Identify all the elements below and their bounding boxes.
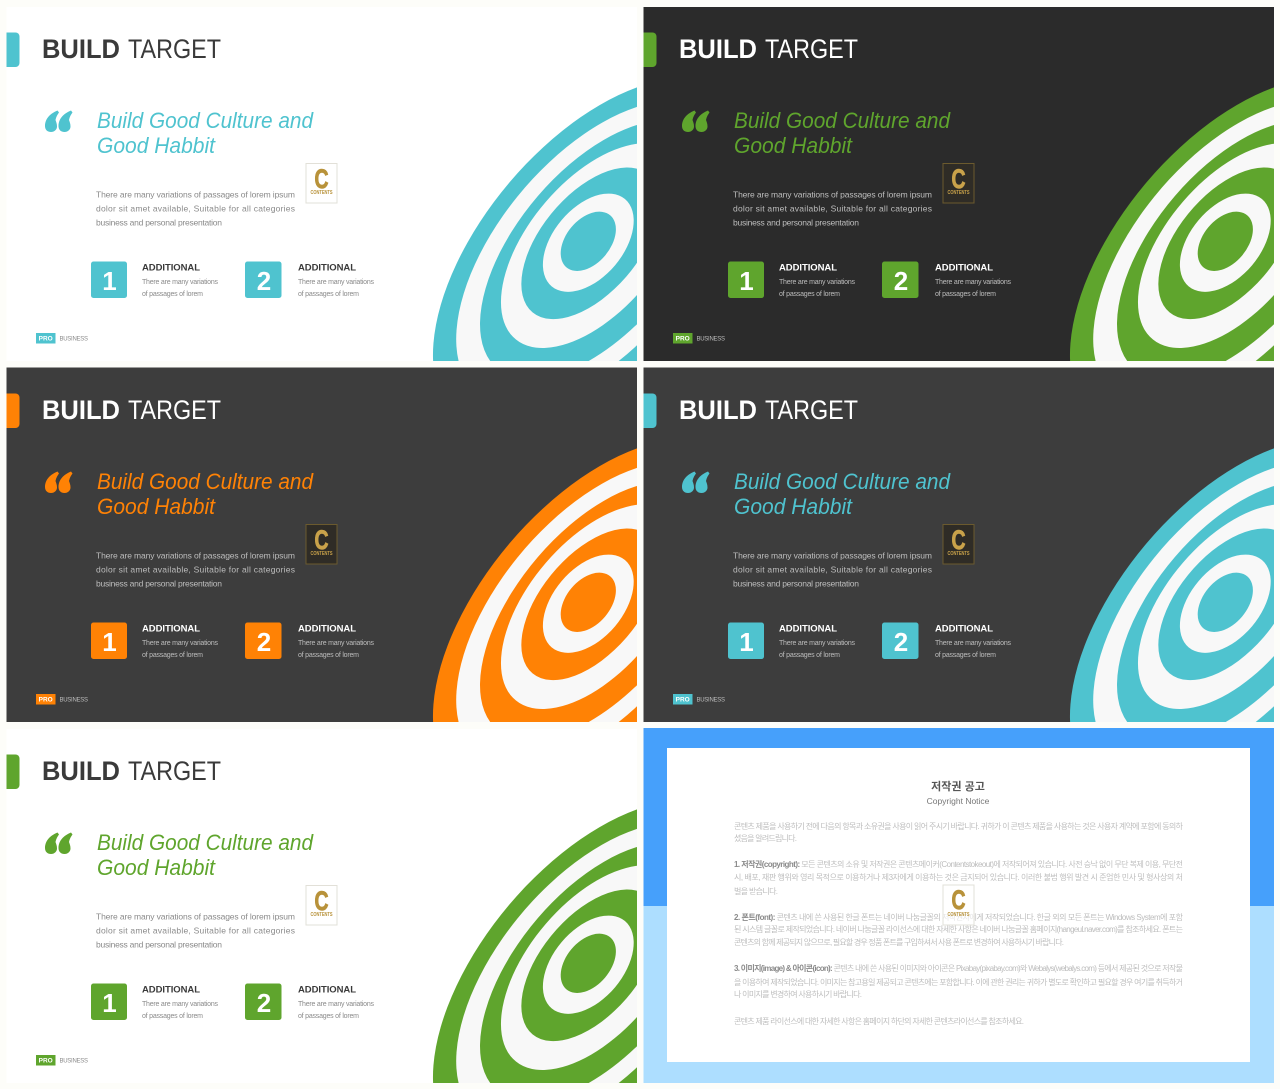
item 1: 1 [102,627,117,657]
body text: business and personal presentation [96,940,222,950]
logo: C [952,164,966,194]
logo: CONTENTS [948,190,970,196]
tab marker [6,394,20,428]
footer badge: PRO [676,697,690,704]
headline [97,469,314,519]
target graphic [433,448,652,722]
logo [943,885,974,925]
body text: There are many variations of passages of lorem ipsum [96,550,295,560]
item 1: 1 [102,988,117,1018]
title [42,34,221,64]
footer badge: BUSINESS [60,1058,88,1064]
logo: CONTENTS [310,190,333,196]
notice heading [927,779,990,806]
body text [733,550,932,588]
target graphic [433,809,652,1083]
footer badge [673,694,725,704]
item 1 [91,984,218,1020]
item 1: There are many variations [142,640,218,647]
footer badge: PRO [39,1058,53,1065]
item 2: 2 [257,266,271,296]
body text [96,912,295,950]
item 1: There are many variations [779,279,856,286]
item 2: ADDITIONAL [298,624,356,634]
body text: dolor sit amet available, Suitable for all categories [96,564,295,574]
item 2: 2 [257,627,271,657]
item 2: of passages of lorem [298,652,359,659]
item 2: There are many variations [298,640,374,647]
tab marker [6,754,20,789]
item 2 [882,262,1012,298]
panel: slide 1 white teal [6,7,652,361]
item 1 [91,262,218,298]
body text: dolor sit amet available, Suitable for all categories [96,204,295,214]
item 2 [245,984,374,1020]
headline: Build Good Culture and [97,830,314,855]
title: TARGET [765,395,858,425]
tab marker [644,32,656,67]
target graphic [1070,448,1280,722]
body text: There are many variations of passages of lorem ipsum [96,190,295,200]
headline: Build Good Culture and [97,469,314,494]
title: TARGET [128,34,221,64]
title: TARGET [128,756,221,786]
body text: dolor sit amet available, Suitable for all categories [733,564,932,574]
title: TARGET [128,395,221,425]
item 1: of passages of lorem [779,652,840,659]
body text [733,190,932,228]
notice heading: 저작권 공고 [931,779,985,793]
item 1: There are many variations [142,1001,218,1008]
footer badge [673,333,725,344]
title: TARGET [765,34,858,64]
item 2 [245,262,374,298]
notice heading: Copyright Notice [927,796,990,806]
headline: Good Habbit [97,494,216,519]
item 1: of passages of lorem [142,291,203,298]
headline: Good Habbit [734,494,853,519]
footer badge [36,1055,88,1066]
headline [734,108,951,158]
headline [734,469,951,519]
item 1 [728,622,856,659]
item 2: of passages of lorem [935,652,996,659]
footer badge: BUSINESS [696,698,725,704]
body text: business and personal presentation [733,578,859,588]
body text [96,550,295,588]
notice body text: 시, 배포, 재판 행위와 영리 목적으로 이용하거나 제3자에게 이용하는 것은 금지되어 있습니다. 이러한 불법 행위 발견 시 준엄한 민사 및 형사상의 처 [734,872,1183,882]
logo [943,164,974,203]
item 2: 2 [257,988,271,1018]
notice body text: 나 이미지를 변경하여 사용하시기 바랍니다. [734,989,862,999]
body text: dolor sit amet available, Suitable for all categories [733,204,932,214]
item 2: ADDITIONAL [935,262,993,274]
item 2: ADDITIONAL [298,984,356,996]
icon: quotation mark [682,472,710,493]
body text: There are many variations of passages of lorem ipsum [733,190,932,200]
item 1: of passages of lorem [142,1013,203,1020]
tab marker [6,32,20,67]
body text [96,190,295,228]
panel: slide 2 black green [644,7,1280,361]
panel: slide 5 white green [6,729,652,1083]
footer badge: BUSINESS [60,698,88,704]
title: BUILD [679,34,757,64]
logo [943,524,974,564]
body text: dolor sit amet available, Suitable for all categories [96,926,295,936]
headline: Build Good Culture and [734,469,951,494]
icon: quotation mark [682,110,710,132]
notice body text: 벌을 받습니다. [734,886,778,896]
item 2: There are many variations [298,1001,374,1008]
item 1 [91,622,218,659]
item 2: 2 [894,266,908,296]
headline: Build Good Culture and [734,108,951,133]
logo: C [314,525,328,555]
notice body text: 된 시스템 글꼴로 제작되었습니다. 네이버 나눔글꼴 라이선스에 대한 자세한 사항은 네이버 나눔글꼴 홈페이지(hangeul.naver.com)를 참조하세요. 폰트는 [734,924,1183,934]
footer badge [36,333,88,344]
item 1: 1 [102,266,117,296]
title [42,756,221,786]
item 1: ADDITIONAL [779,624,837,634]
logo: C [952,525,966,555]
headline: Good Habbit [97,133,216,158]
item 2: There are many variations [298,279,374,286]
item 1: of passages of lorem [779,291,840,298]
item 2: of passages of lorem [298,1013,359,1020]
notice body text: 셨음을 알려드립니다. [734,833,797,843]
notice body text: 3. 이미지(image) & 아이콘(icon): 콘텐츠 내에 쓴 사용된 이미지와 아이콘은 Pixabay(pixabay.com)와 Webalys(webalys.com) 등에서 제공된 것으로 저작물 [734,963,1183,973]
logo [306,164,337,203]
body text: business and personal presentation [96,578,222,588]
notice body text: 2. 폰트(font): 콘텐츠 내에 쓴 사용된 한글 폰트는 네이버 나눔글꼴의 저작권자에게 저작되었습니다. 한글 외의 모든 폰트는 Windows System에 포함 [734,912,1184,922]
notice body text: 을 이용하여 제작되었습니다. 이미지는 참고용일 제공되고 콘텐츠에는 포함합니다. 이에 관한 권리는 귀하가 별도로 확인하고 필요할 경우 여기를 취득하거 [734,977,1183,987]
item 1: 1 [739,627,754,657]
item 1 [728,262,856,298]
item 2: There are many variations [935,640,1012,647]
title: BUILD [42,34,120,64]
logo: C [314,164,328,194]
item 1: ADDITIONAL [142,624,200,634]
item 2: of passages of lorem [935,291,996,298]
notice body text: 콘텐츠 제품 라이선스에 대한 자세한 사항은 홈페이지 하단의 자세한 콘텐츠라이선스를 참조하세요. [734,1016,1024,1026]
headline: Good Habbit [97,855,216,880]
footer badge: BUSINESS [60,336,88,342]
item 1: ADDITIONAL [142,984,200,996]
footer badge: PRO [39,697,53,704]
body text: business and personal presentation [733,218,859,228]
body text: There are many variations of passages of lorem ipsum [733,550,932,560]
headline [97,830,314,880]
headline: Good Habbit [734,133,853,158]
item 2: There are many variations [935,279,1012,286]
title: BUILD [679,395,757,425]
headline: Build Good Culture and [97,108,314,133]
notice body text [734,821,1184,1026]
icon: quotation mark [45,832,72,854]
logo: CONTENTS [310,551,333,557]
item 2: 2 [894,627,908,657]
item 1: 1 [739,266,754,296]
item 2: ADDITIONAL [298,262,356,274]
notice body text: 콘텐츠의 함께 제공되지 않으므로, 필요할 경우 정품 폰트를 구입하셔서 사용 폰트로 변경하여 사용하시기 바랍니다. [734,937,1064,947]
logo: C [952,885,966,915]
item 1: There are many variations [142,279,218,286]
item 2 [245,622,374,659]
item 2: ADDITIONAL [935,624,993,634]
title: BUILD [42,756,120,786]
body text: business and personal presentation [96,218,222,228]
footer badge: BUSINESS [696,336,725,342]
item 1: There are many variations [779,640,856,647]
panel: slide 3 gray orange [6,368,652,722]
headline [97,108,314,158]
title [679,34,858,64]
footer badge [36,694,88,704]
panel: slide 4 gray teal [644,368,1280,722]
notice body text: 1. 저작권(copyright): 모든 콘텐츠의 소유 및 저작권은 콘텐츠메이커(Contentstokeout)에 저작되어져 있습니다. 사전 승낙 없이 무단 복제 이용, 무단전 [734,859,1183,869]
item 1: ADDITIONAL [142,262,200,274]
target graphic [433,87,652,361]
logo: CONTENTS [948,912,970,918]
logo: CONTENTS [310,912,333,918]
logo: CONTENTS [948,551,970,557]
title: BUILD [42,395,120,425]
footer badge: PRO [676,336,690,343]
body text: There are many variations of passages of lorem ipsum [96,912,295,922]
logo: C [314,886,328,916]
icon: quotation mark [45,110,72,132]
logo [306,524,337,564]
tab marker [644,394,656,428]
target graphic [1070,87,1280,361]
icon: quotation mark [45,472,72,493]
item 2 [882,622,1012,659]
panel: copyright notice slide [644,728,1274,1083]
item 1: of passages of lorem [142,652,203,659]
item 1: ADDITIONAL [779,262,837,274]
footer badge: PRO [39,336,53,343]
title [42,395,221,425]
logo [306,886,337,925]
item 2: of passages of lorem [298,291,359,298]
title [679,395,858,425]
notice body text: 콘텐츠 제품을 사용하기 전에 다음의 항목과 소유권을 사용이 읽어 주시기 바랍니다. 귀하가 이 콘텐츠 제품을 사용하는 것은 사용자 계약에 포함에 동의하 [734,821,1184,831]
